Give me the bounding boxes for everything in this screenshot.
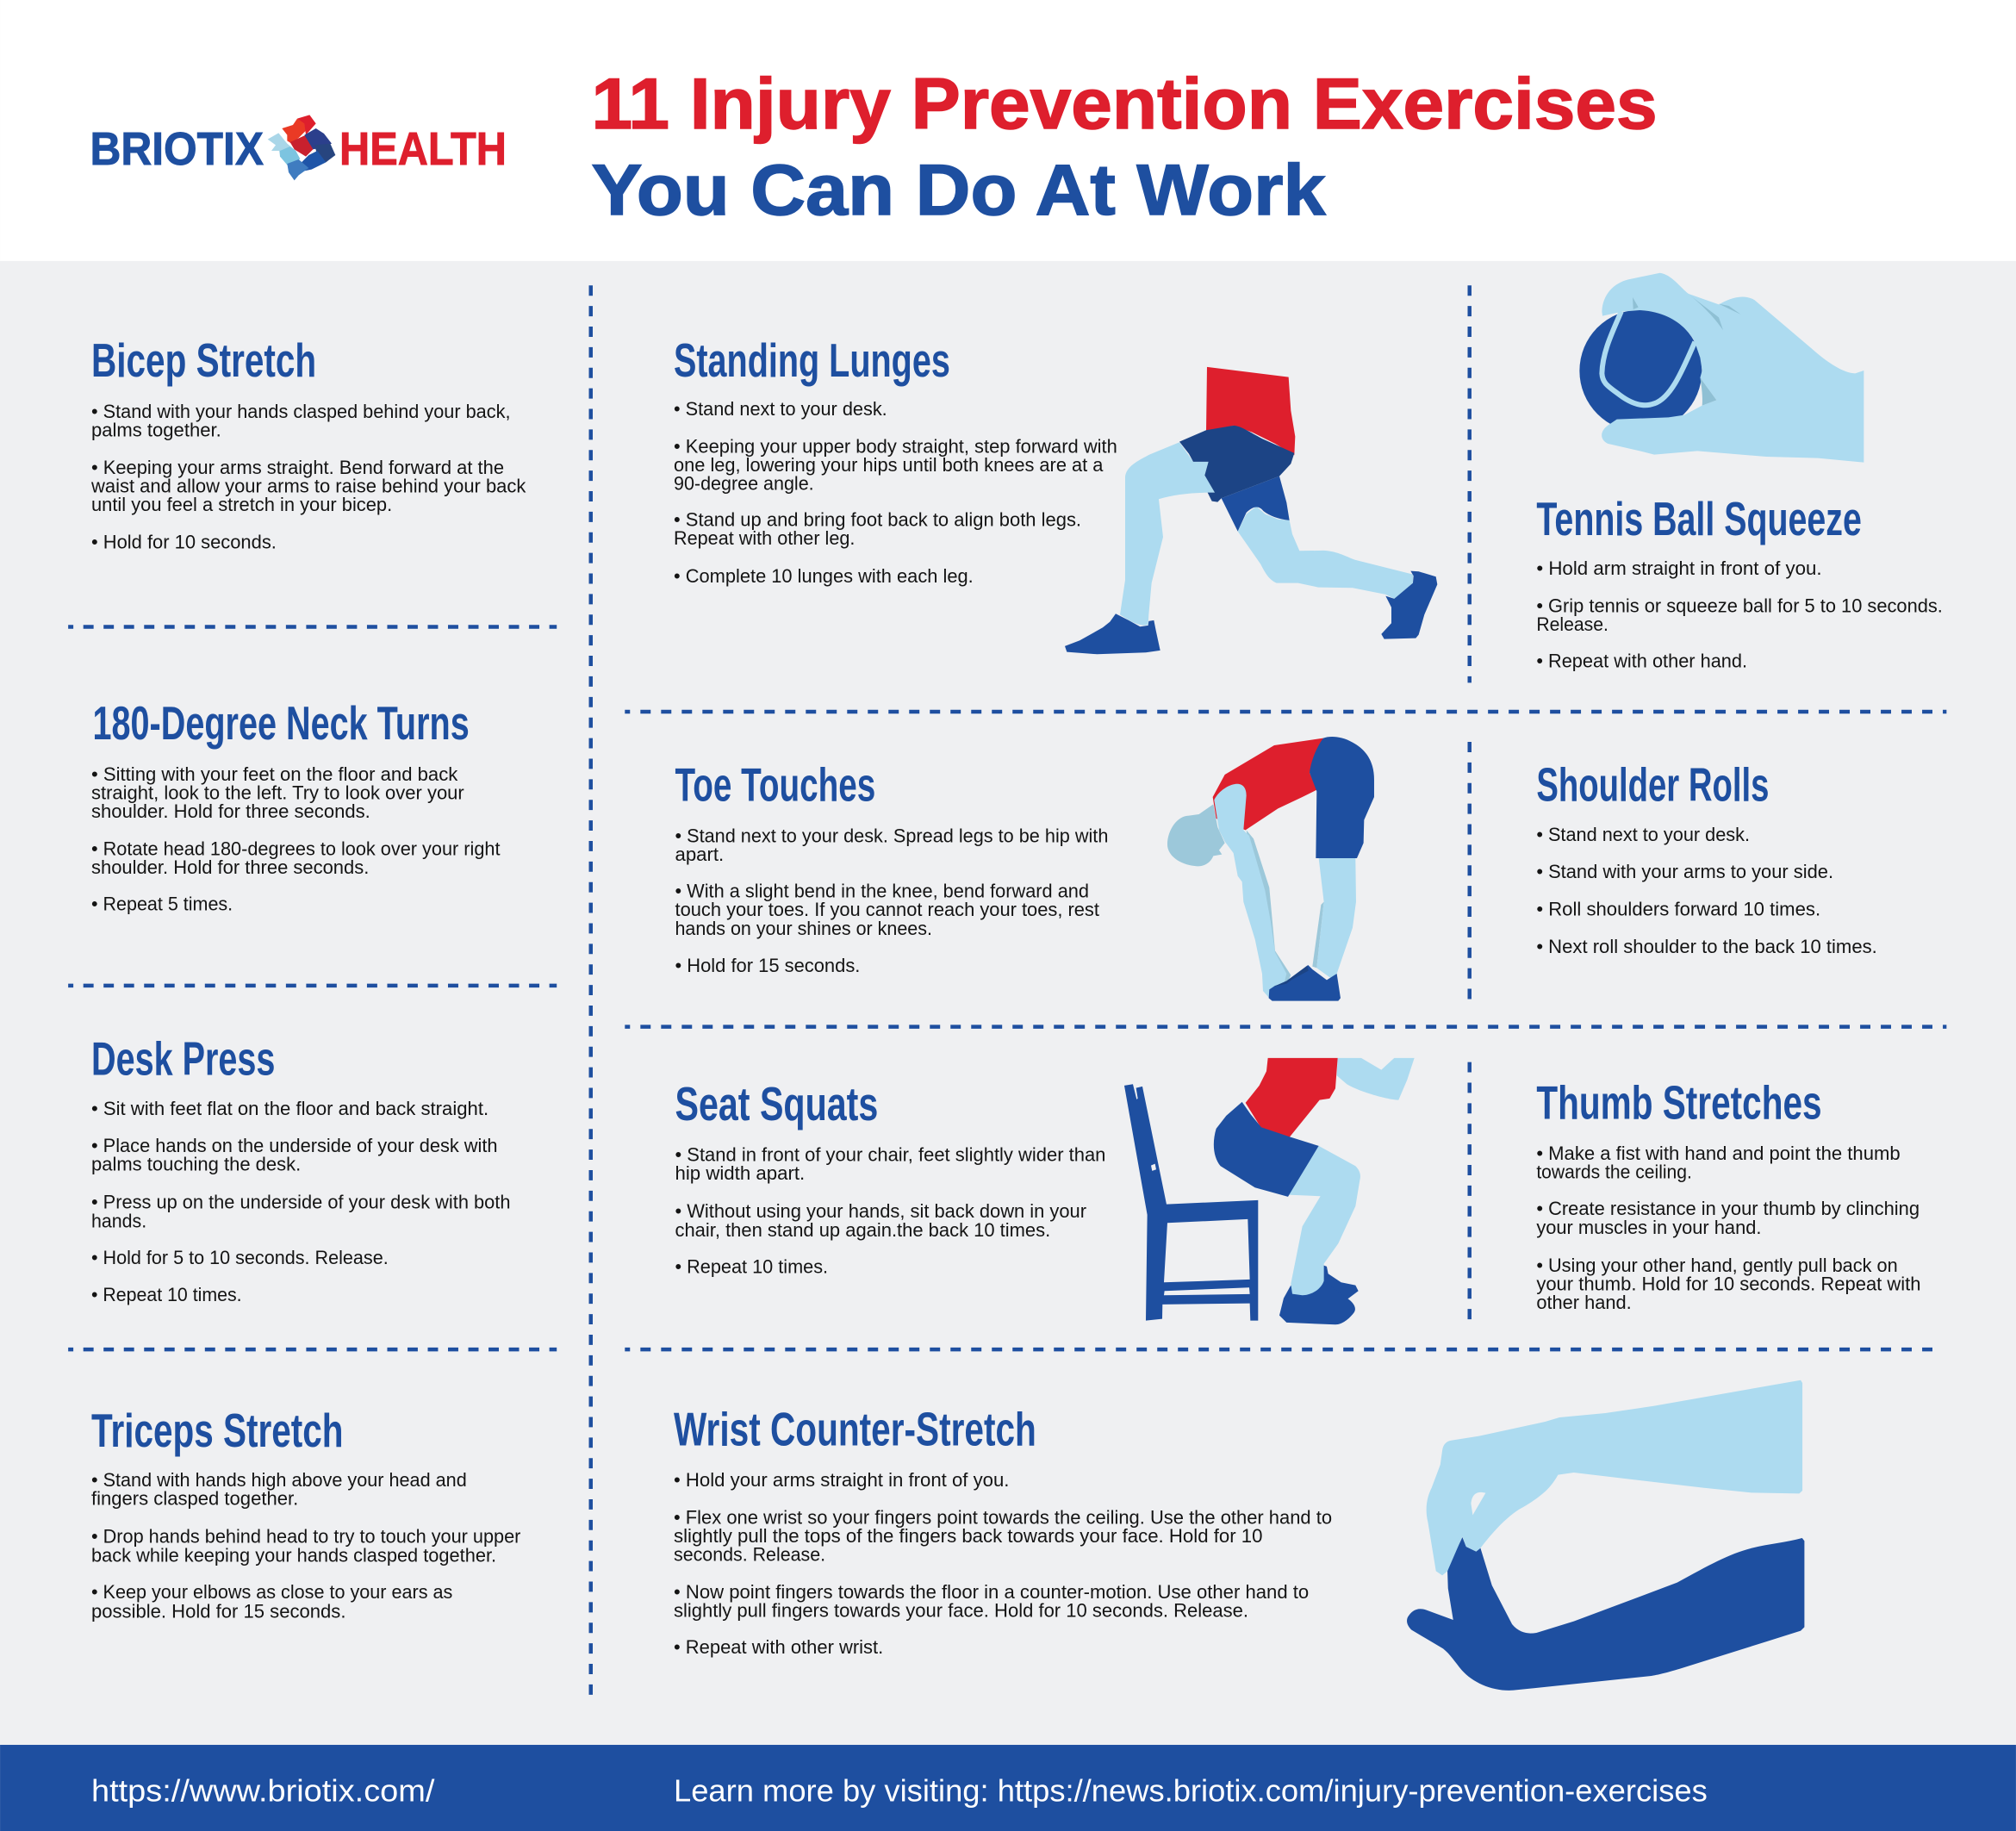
text: toe touches steps: • With a slight bend in the knee, bend forward and bbox=[675, 881, 1089, 902]
text: bicep stretch steps: • Hold for 10 seconds. bbox=[91, 531, 277, 552]
text: desk press steps: • Hold for 5 to 10 seconds. Release. bbox=[91, 1247, 389, 1268]
icon: wrist stretch arms bbox=[1407, 1380, 1804, 1691]
heading: tennis ball squeeze: Tennis Ball Squeeze bbox=[1536, 492, 1862, 545]
text: wrist counter-stretch steps: • Hold your arms straight in front of you. bbox=[674, 1469, 1009, 1491]
text: neck turns steps: • Sitting with your feet on the floor and back bbox=[91, 763, 457, 785]
text: desk press steps bbox=[91, 1098, 510, 1305]
panel: thumb stretches bbox=[1536, 1075, 1921, 1313]
icon: hand squeezing ball bbox=[1579, 273, 1864, 463]
text: toe touches steps: • Hold for 15 seconds. bbox=[675, 955, 860, 976]
text: thumb stretches steps: your muscles in your hand. bbox=[1536, 1217, 1761, 1238]
text: wrist counter-stretch steps: slightly pull the tops of the fingers back towards your face. Hold for 10 bbox=[674, 1525, 1262, 1547]
panel: standing lunges bbox=[674, 333, 1437, 654]
panel: triceps stretch bbox=[91, 1404, 520, 1622]
heading: thumb stretches: Thumb Stretches bbox=[1536, 1075, 1822, 1129]
text: triceps stretch steps: • Keep your elbows as close to your ears as bbox=[91, 1581, 452, 1603]
title: 11 Injury Prevention Exercises bbox=[592, 63, 1658, 144]
text: bicep stretch steps: palms together. bbox=[91, 420, 221, 441]
text: neck turns steps: straight, look to the left. Try to look over your bbox=[91, 782, 464, 803]
text: bicep stretch steps bbox=[90, 401, 526, 552]
text: desk press steps: • Place hands on the underside of your desk with bbox=[91, 1135, 498, 1156]
text: thumb stretches steps bbox=[1536, 1143, 1921, 1313]
text: standing lunges steps: • Keeping your upper body straight, step forward with bbox=[674, 435, 1117, 457]
text: standing lunges steps: 90-degree angle. bbox=[674, 473, 814, 495]
heading: standing lunges: Standing Lunges bbox=[674, 333, 950, 387]
text: neck turns steps bbox=[91, 763, 501, 915]
text: shoulder rolls steps: • Next roll shoulder to the back 10 times. bbox=[1536, 936, 1877, 957]
text: wrist counter-stretch steps bbox=[674, 1469, 1332, 1658]
logo: HEALTH bbox=[339, 123, 507, 175]
text: triceps stretch steps bbox=[91, 1469, 520, 1622]
panel: seat squats bbox=[675, 1058, 1415, 1324]
footer band bbox=[0, 1745, 2016, 1831]
text: desk press steps: • Press up on the underside of your desk with both bbox=[91, 1192, 510, 1213]
text: seat squats steps bbox=[675, 1144, 1105, 1277]
heading: toe touches: Toe Touches bbox=[675, 758, 875, 812]
icon: logo mark bbox=[268, 115, 335, 180]
text: toe touches steps: hands on your shines or knees. bbox=[675, 918, 932, 939]
text: standing lunges steps: • Stand next to your desk. bbox=[674, 398, 887, 420]
text: toe touches steps: touch your toes. If you cannot reach your toes, rest bbox=[675, 899, 1099, 920]
text: shoulder rolls steps bbox=[1536, 824, 1877, 957]
text: standing lunges steps: • Complete 10 lunges with each leg. bbox=[674, 565, 974, 587]
text: seat squats steps: • Without using your hands, sit back down in your bbox=[675, 1200, 1086, 1222]
text: bicep stretch steps: • Stand with your hands clasped behind your back, bbox=[91, 401, 510, 422]
title bbox=[592, 63, 1658, 230]
logo bbox=[90, 115, 507, 180]
text: wrist counter-stretch steps: slightly pull fingers towards your face. Hold for 10 seconds. Release. bbox=[674, 1600, 1248, 1622]
panel: bicep stretch bbox=[90, 333, 526, 552]
text: seat squats steps: hip width apart. bbox=[675, 1162, 805, 1184]
text: neck turns steps: • Rotate head 180-degrees to look over your right bbox=[91, 838, 501, 859]
text: neck turns steps: shoulder. Hold for three seconds. bbox=[91, 856, 369, 878]
text: shoulder rolls steps: • Roll shoulders forward 10 times. bbox=[1536, 899, 1820, 920]
text: wrist counter-stretch steps: seconds. Release. bbox=[674, 1544, 825, 1566]
text: desk press steps: hands. bbox=[91, 1210, 146, 1231]
heading: seat squats: Seat Squats bbox=[675, 1077, 878, 1130]
heading: shoulder rolls: Shoulder Rolls bbox=[1536, 758, 1769, 812]
text: seat squats steps: • Repeat 10 times. bbox=[675, 1255, 828, 1277]
heading: bicep stretch: Bicep Stretch bbox=[91, 333, 316, 387]
text: bicep stretch steps: • Keeping your arms straight. Bend forward at the bbox=[91, 457, 504, 478]
icon: chair squat figure bbox=[1124, 1058, 1415, 1324]
panel: desk press bbox=[91, 1032, 510, 1305]
text: desk press steps: • Repeat 10 times. bbox=[91, 1284, 242, 1305]
text: tennis ball squeeze steps: • Repeat with other hand. bbox=[1536, 650, 1747, 671]
text: standing lunges steps: • Stand up and bring foot back to align both legs. bbox=[674, 508, 1081, 530]
text: seat squats steps: • Stand in front of your chair, feet slightly wider than bbox=[675, 1144, 1105, 1166]
text: standing lunges steps: Repeat with other leg. bbox=[674, 527, 855, 549]
panel: wrist counter-stretch bbox=[674, 1380, 1804, 1691]
text: triceps stretch steps: • Drop hands behind head to try to touch your upper bbox=[91, 1526, 520, 1548]
text: tennis ball squeeze steps bbox=[1536, 557, 1943, 671]
text: thumb stretches steps: your thumb. Hold for 10 seconds. Repeat with bbox=[1536, 1273, 1921, 1294]
text: bicep stretch steps: until you feel a stretch in your bicep. bbox=[91, 494, 392, 515]
panel: shoulder rolls bbox=[1536, 758, 1877, 957]
text: toe touches steps bbox=[675, 825, 1108, 976]
text: toe touches steps: apart. bbox=[675, 844, 724, 865]
text: thumb stretches steps: towards the ceiling. bbox=[1536, 1162, 1692, 1183]
header band bbox=[0, 0, 2016, 261]
text: standing lunges steps: one leg, lowering your hips until both knees are at a bbox=[674, 454, 1104, 476]
text: wrist counter-stretch steps: • Now point fingers towards the floor in a counter-motion. Use other hand to bbox=[674, 1581, 1309, 1603]
heading: neck turns: 180-Degree Neck Turns bbox=[92, 696, 470, 750]
heading: desk press: Desk Press bbox=[91, 1032, 275, 1086]
title: You Can Do At Work bbox=[592, 149, 1326, 230]
text: bicep stretch steps: waist and allow your arms to raise behind your back bbox=[90, 476, 526, 497]
text: desk press steps: • Sit with feet flat on the floor and back straight. bbox=[91, 1098, 488, 1119]
footer link: learn more: Learn more by visiting: https://news.briotix.com/injury-prevention-exercises bbox=[674, 1773, 1708, 1809]
text: wrist counter-stretch steps: • Repeat with other wrist. bbox=[674, 1636, 883, 1658]
footer link: homepage: https://www.briotix.com/ bbox=[91, 1773, 435, 1809]
heading: triceps stretch: Triceps Stretch bbox=[91, 1404, 343, 1457]
text: neck turns steps: shoulder. Hold for three seconds. bbox=[91, 800, 370, 822]
text: triceps stretch steps: fingers clasped together. bbox=[91, 1488, 298, 1510]
panel: neck turns bbox=[91, 696, 501, 915]
panel: toe touches bbox=[675, 737, 1374, 1001]
text: thumb stretches steps: other hand. bbox=[1536, 1292, 1632, 1313]
text: triceps stretch steps: • Stand with hands high above your head and bbox=[91, 1469, 467, 1491]
panel: tennis ball squeeze bbox=[1536, 273, 1943, 671]
icon: toe touch figure bbox=[1167, 737, 1374, 1001]
heading: wrist counter-stretch: Wrist Counter-Stretch bbox=[674, 1402, 1036, 1455]
text: desk press steps: palms touching the desk. bbox=[91, 1154, 301, 1175]
text: neck turns steps: • Repeat 5 times. bbox=[91, 894, 233, 915]
text: triceps stretch steps: back while keeping your hands clasped together. bbox=[91, 1544, 496, 1566]
icon: lunging figure bbox=[1065, 367, 1437, 654]
text: shoulder rolls steps: • Stand with your arms to your side. bbox=[1536, 861, 1833, 882]
text: wrist counter-stretch steps: • Flex one wrist so your fingers point towards the ceiling. Use the other hand to bbox=[674, 1506, 1332, 1528]
text: thumb stretches steps: • Using your other hand, gently pull back on bbox=[1536, 1255, 1898, 1276]
text: tennis ball squeeze steps: • Hold arm straight in front of you. bbox=[1536, 557, 1822, 579]
text: shoulder rolls steps: • Stand next to your desk. bbox=[1536, 824, 1750, 845]
text: toe touches steps: • Stand next to your desk. Spread legs to be hip with bbox=[675, 825, 1108, 846]
text: standing lunges steps bbox=[674, 398, 1117, 587]
logo: BRIOTIX bbox=[90, 123, 264, 175]
text: triceps stretch steps: possible. Hold for 15 seconds. bbox=[91, 1600, 345, 1622]
text: thumb stretches steps: • Make a fist with hand and point the thumb bbox=[1536, 1143, 1901, 1164]
text: tennis ball squeeze steps: • Grip tennis or squeeze ball for 5 to 10 seconds. bbox=[1536, 595, 1943, 616]
text: thumb stretches steps: • Create resistance in your thumb by clinching bbox=[1536, 1198, 1920, 1219]
text: seat squats steps: chair, then stand up again.the back 10 times. bbox=[675, 1219, 1050, 1241]
text: tennis ball squeeze steps: Release. bbox=[1536, 613, 1608, 635]
